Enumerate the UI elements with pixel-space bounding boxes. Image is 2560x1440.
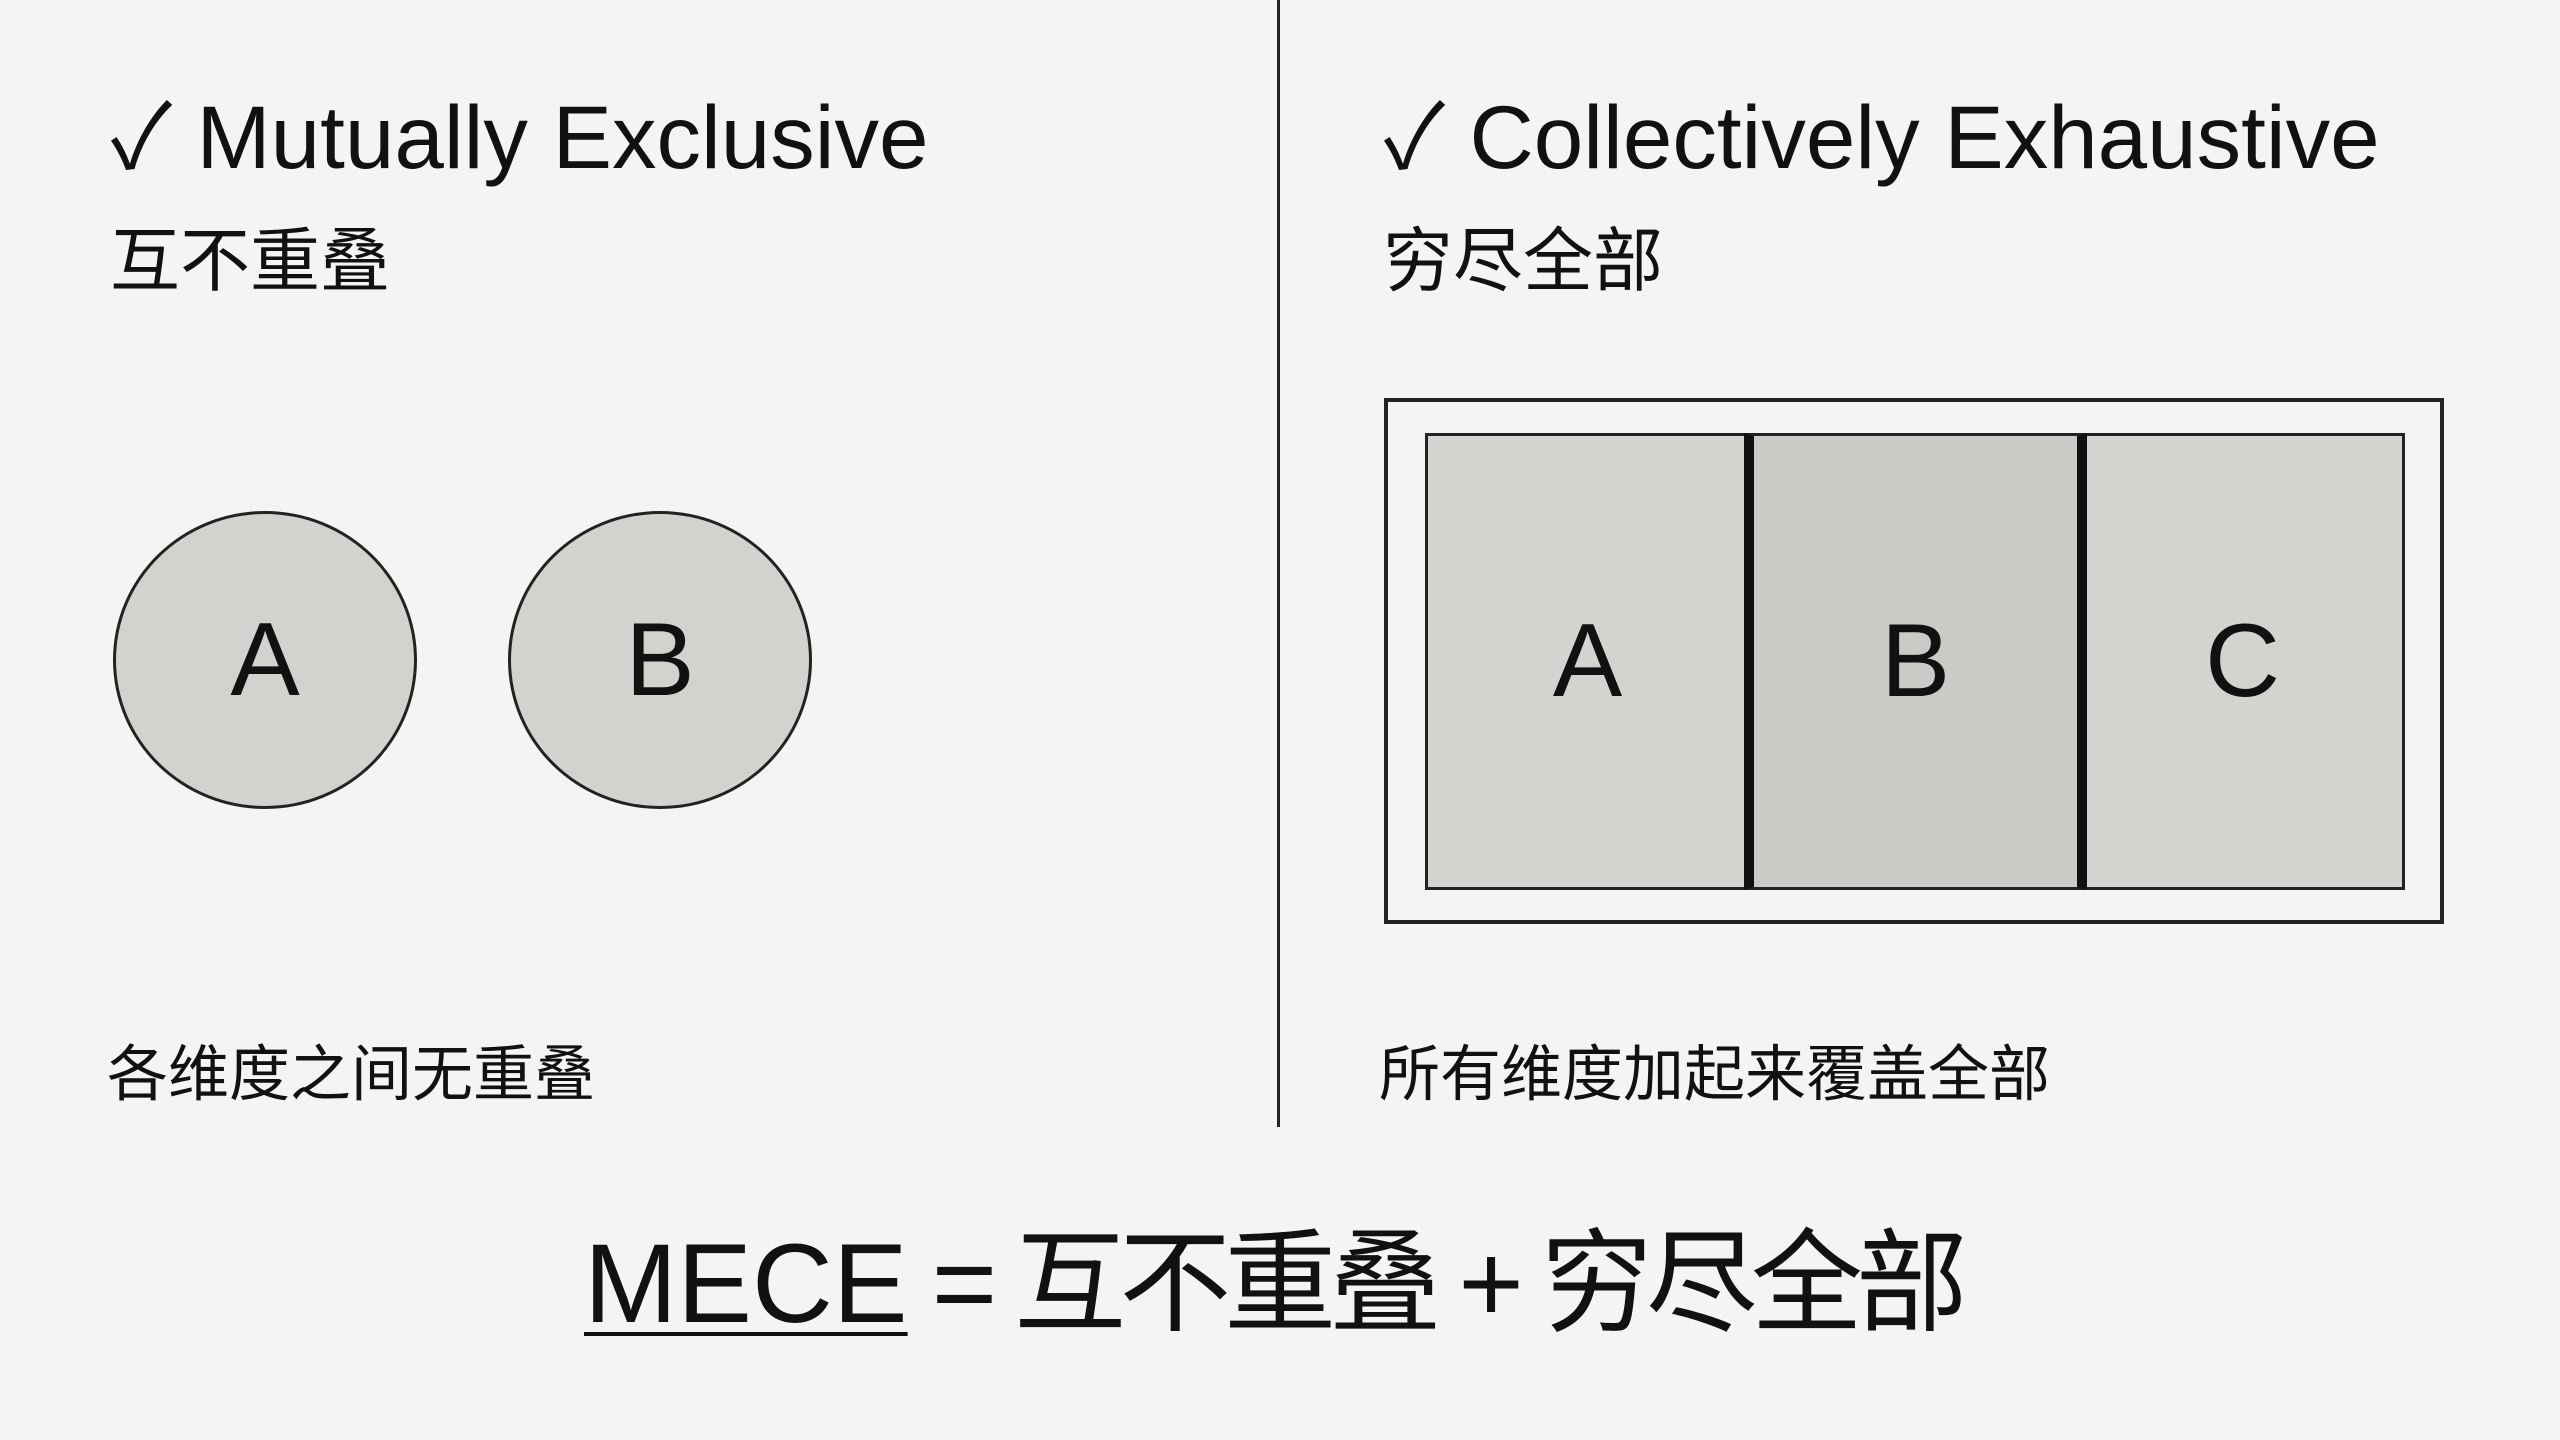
cell B: [1744, 433, 2087, 890]
circle B: [508, 511, 812, 809]
cell A: A: [1553, 603, 1622, 719]
left subheading: 互不重叠: [110, 222, 390, 300]
divider: [1277, 0, 1280, 1127]
cell C: C: [2205, 603, 2280, 719]
left heading: ✓ Mutually Exclusive: [111, 87, 929, 187]
left caption: 各维度之间无重叠: [107, 1040, 595, 1108]
cell A: [1425, 433, 1750, 890]
bottom formula: MECE = 互不重叠 + 穷尽全部: [584, 1221, 1961, 1346]
circle A: A: [230, 602, 300, 718]
right caption: 所有维度加起来覆盖全部: [1379, 1040, 2050, 1108]
circle A: [113, 511, 417, 809]
right subheading: 穷尽全部: [1383, 222, 1663, 300]
circle B: B: [625, 602, 695, 718]
partition diagram: [1384, 398, 2444, 924]
right heading: ✓ Collectively Exhaustive: [1384, 87, 2380, 187]
cell C: [2080, 433, 2405, 890]
cell B: B: [1881, 603, 1950, 719]
